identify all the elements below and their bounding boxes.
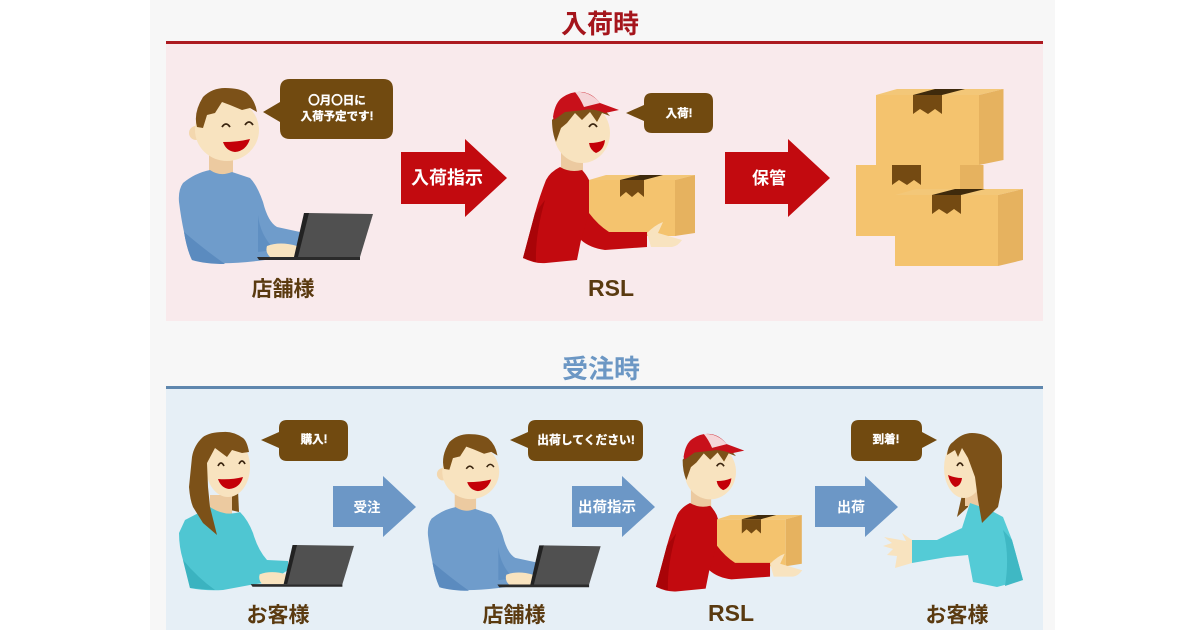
speech bubble: arrival date [263, 79, 393, 139]
arrow: 出荷指示 [572, 476, 655, 537]
speech bubble: 入荷!: 入荷! [666, 106, 692, 120]
figure: shop owner with laptop [179, 88, 373, 264]
panel: 入荷時 [166, 9, 1043, 321]
figure: customer receiving parcel [883, 433, 1023, 587]
arrow: 保管 [725, 139, 830, 217]
page background [150, 0, 1055, 630]
speech bubble: 購入!: 購入! [301, 432, 327, 446]
speech bubble: 購入! [261, 420, 348, 461]
arrow: 出荷 [815, 476, 898, 537]
label: 店舗様: 店舗様 [482, 604, 546, 627]
speech bubble: 到着!: 到着! [873, 432, 899, 446]
label: お客様: お客様 [926, 604, 988, 627]
speech bubble: 到着! [851, 420, 937, 461]
icon: stacked boxes [856, 89, 1023, 266]
speech bubble: arrival date: 入荷予定です! [301, 109, 373, 123]
label: お客様: お客様 [246, 604, 310, 627]
label: RSL: RSL [708, 600, 754, 626]
figure: RSL courier holding box [523, 92, 695, 263]
arrow: 出荷: 出荷 [837, 499, 865, 515]
panel: 受注時 [166, 354, 1043, 630]
arrow: 受注: 受注 [354, 499, 381, 515]
heading: 入荷時: 入荷時 [561, 9, 639, 39]
speech bubble: arrival date: 〇月〇日に [308, 94, 366, 107]
speech bubble: 出荷してください! [510, 420, 643, 461]
figure: shop owner with laptop [428, 434, 601, 591]
figure: customer with laptop [179, 432, 354, 590]
speech bubble: 出荷してください!: 出荷してください! [537, 433, 635, 447]
panel background [166, 44, 1043, 321]
arrow: 出荷指示: 出荷指示 [578, 498, 636, 516]
arrow: 入荷指示: 入荷指示 [411, 167, 483, 188]
figure: RSL courier holding box [656, 434, 802, 591]
label: RSL: RSL [588, 275, 634, 301]
arrow: 保管: 保管 [752, 168, 786, 188]
heading: 受注時: 受注時 [562, 354, 640, 384]
label: 店舗様: 店舗様 [252, 278, 314, 301]
panel background [166, 389, 1043, 630]
speech bubble: 入荷! [626, 93, 713, 133]
arrow: 入荷指示 [401, 139, 507, 217]
arrow: 受注 [333, 476, 416, 537]
